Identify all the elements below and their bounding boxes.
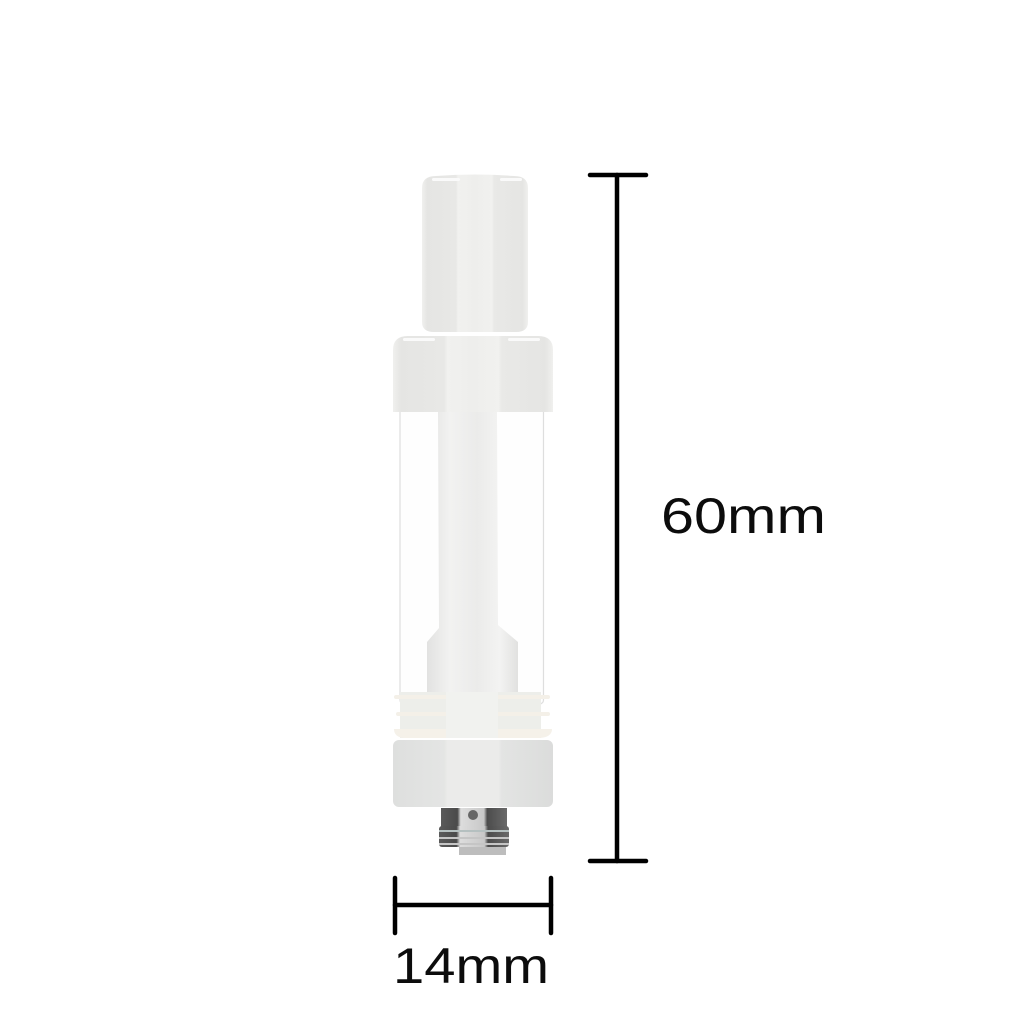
threaded section — [394, 692, 552, 738]
height label: 60mm — [661, 488, 826, 544]
width dimension line — [395, 878, 551, 933]
width label: 14mm — [393, 938, 549, 994]
central tube — [427, 412, 518, 694]
height dimension line — [590, 175, 646, 861]
glass tank — [400, 408, 544, 704]
mouthpiece — [422, 174, 528, 332]
base ring — [393, 740, 553, 807]
collar — [393, 336, 553, 412]
cartridge — [393, 174, 553, 855]
connector pin — [439, 808, 509, 855]
